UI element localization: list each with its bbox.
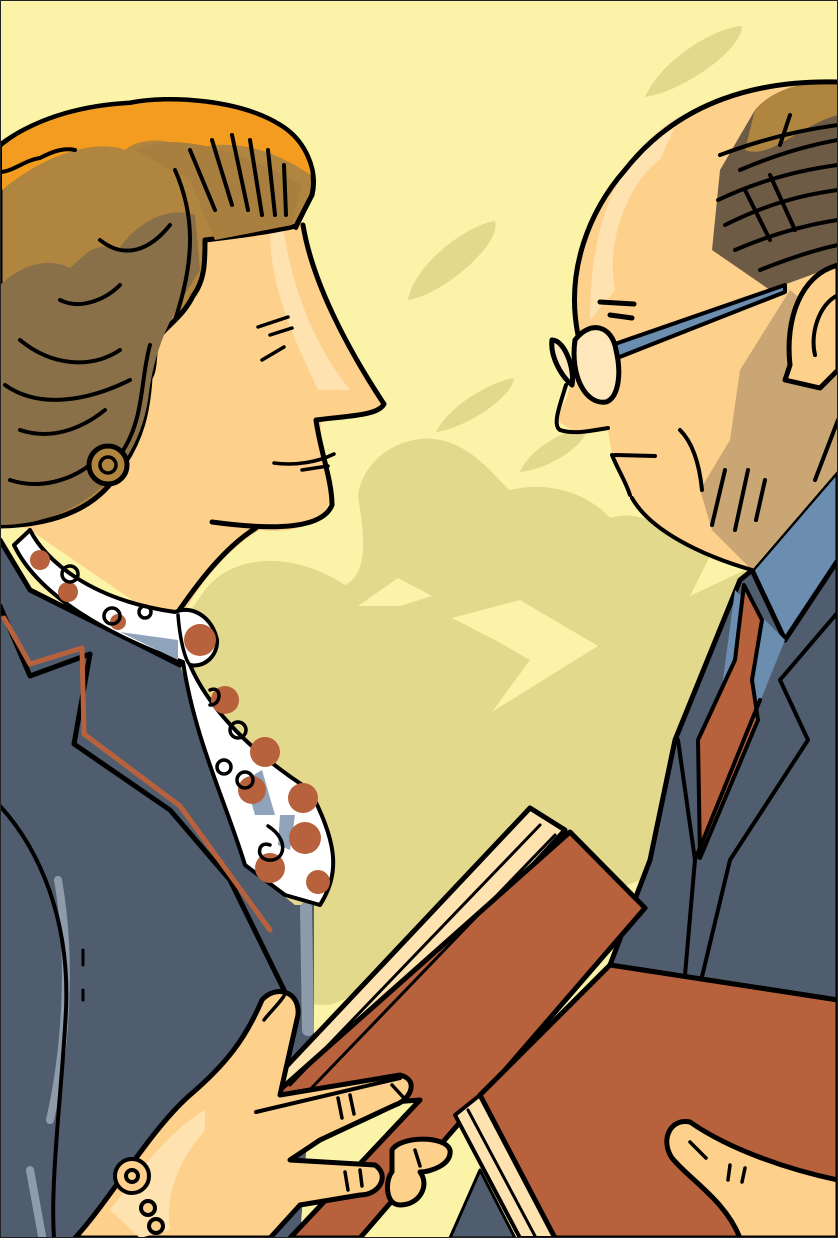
figure: man (552, 82, 838, 1000)
jacket outline (0, 540, 180, 665)
eye and mouth lines (258, 317, 334, 470)
figure: woman (0, 99, 384, 1238)
front book pages (250, 808, 565, 1120)
scarf dots (30, 550, 330, 894)
face shadow (700, 290, 838, 570)
face highlight (590, 115, 680, 320)
scarf shadows (120, 632, 295, 850)
extra fingers (387, 1139, 450, 1205)
hair strokes (0, 99, 313, 484)
ear (785, 265, 838, 388)
background streaks (408, 26, 742, 472)
man jacket bottom (450, 1170, 515, 1238)
bracelet (115, 1159, 163, 1233)
scarf swirls (62, 566, 283, 860)
hair shadow (0, 212, 200, 525)
hair (0, 99, 313, 526)
neck and face (0, 222, 384, 630)
head outline (575, 82, 838, 335)
jacket highlights (30, 880, 308, 1236)
hand: man (667, 1122, 838, 1238)
face highlight (270, 220, 350, 390)
books (250, 808, 838, 1238)
hair highlight (2, 99, 311, 190)
lapel (0, 606, 284, 990)
jacket (610, 500, 838, 1000)
hand: woman (75, 992, 450, 1238)
jacket (0, 540, 314, 1238)
shirt collar (752, 470, 838, 640)
eyebrow (600, 302, 634, 318)
second book (480, 965, 838, 1238)
hair strokes (718, 115, 838, 270)
tie (698, 585, 762, 858)
face lines (557, 385, 838, 570)
background smoke cloud (170, 439, 745, 1005)
cloud highlights (358, 552, 745, 712)
hair (712, 82, 838, 290)
glasses arm (612, 285, 785, 360)
second book pages (455, 1095, 555, 1238)
glasses (552, 328, 619, 402)
front book cover (255, 832, 645, 1238)
face outline (212, 225, 384, 527)
scarf (14, 530, 333, 905)
icon: earring (89, 446, 127, 484)
head (556, 84, 838, 570)
jacket lines (678, 612, 838, 985)
